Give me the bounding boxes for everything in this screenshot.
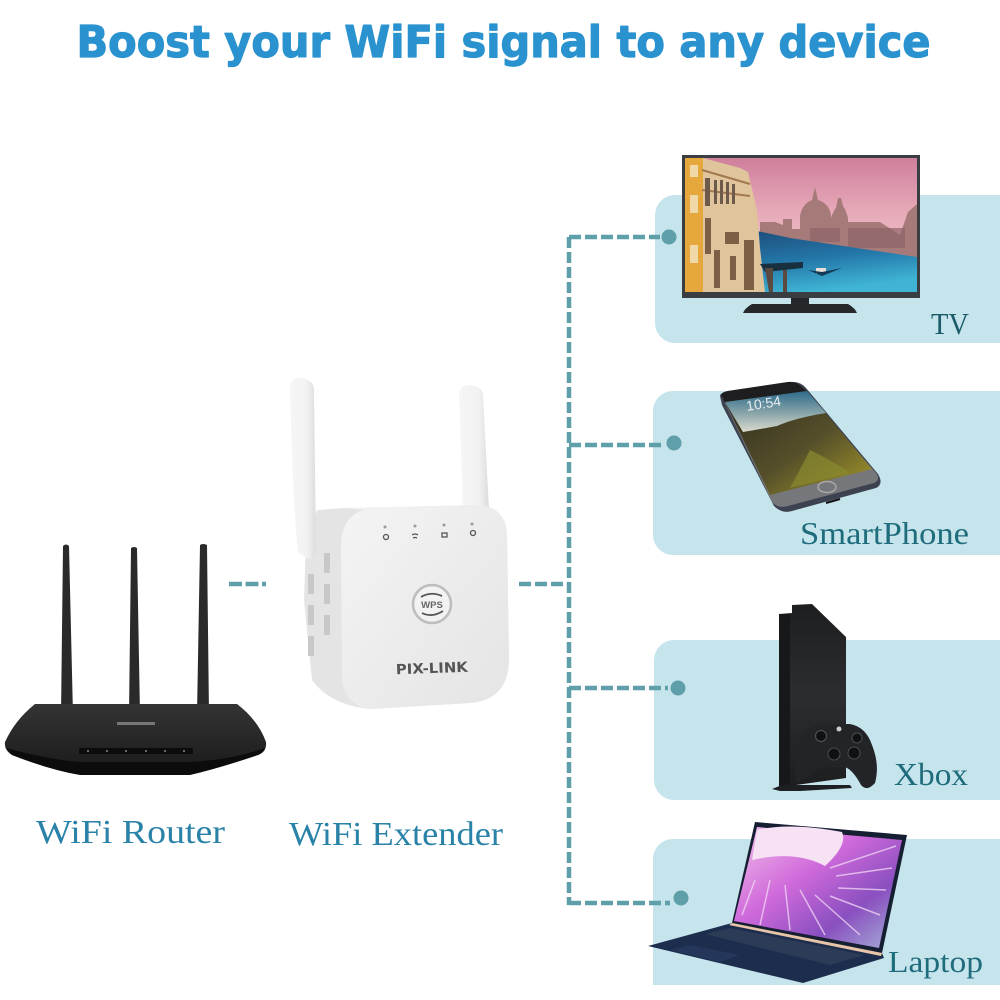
label: TV: TV [931, 306, 970, 341]
wifi extender: WPS [421, 600, 443, 611]
panel: SmartPhone [653, 382, 1000, 555]
label: WiFi Router: WiFi Router [36, 814, 226, 851]
game console [772, 604, 852, 791]
label: SmartPhone: SmartPhone [800, 515, 969, 551]
smartphone: 10:54 [745, 393, 782, 414]
game controller [795, 724, 877, 788]
panel: Laptop [648, 822, 1000, 985]
connector lines [229, 230, 688, 906]
panel: Xbox [654, 604, 1000, 800]
label: Laptop: Laptop [888, 944, 983, 979]
wifi extender: PIX-LINK [396, 660, 469, 678]
TV set [682, 155, 920, 313]
smartphone [720, 382, 881, 512]
label: Xbox: Xbox [894, 756, 968, 792]
panel: TV [655, 155, 1000, 343]
label: WiFi Extender: WiFi Extender [289, 816, 504, 853]
laptop [648, 822, 907, 983]
title: Boost your WiFi signal to any device [76, 17, 930, 68]
wifi router [5, 544, 266, 775]
wifi extender [290, 378, 509, 709]
